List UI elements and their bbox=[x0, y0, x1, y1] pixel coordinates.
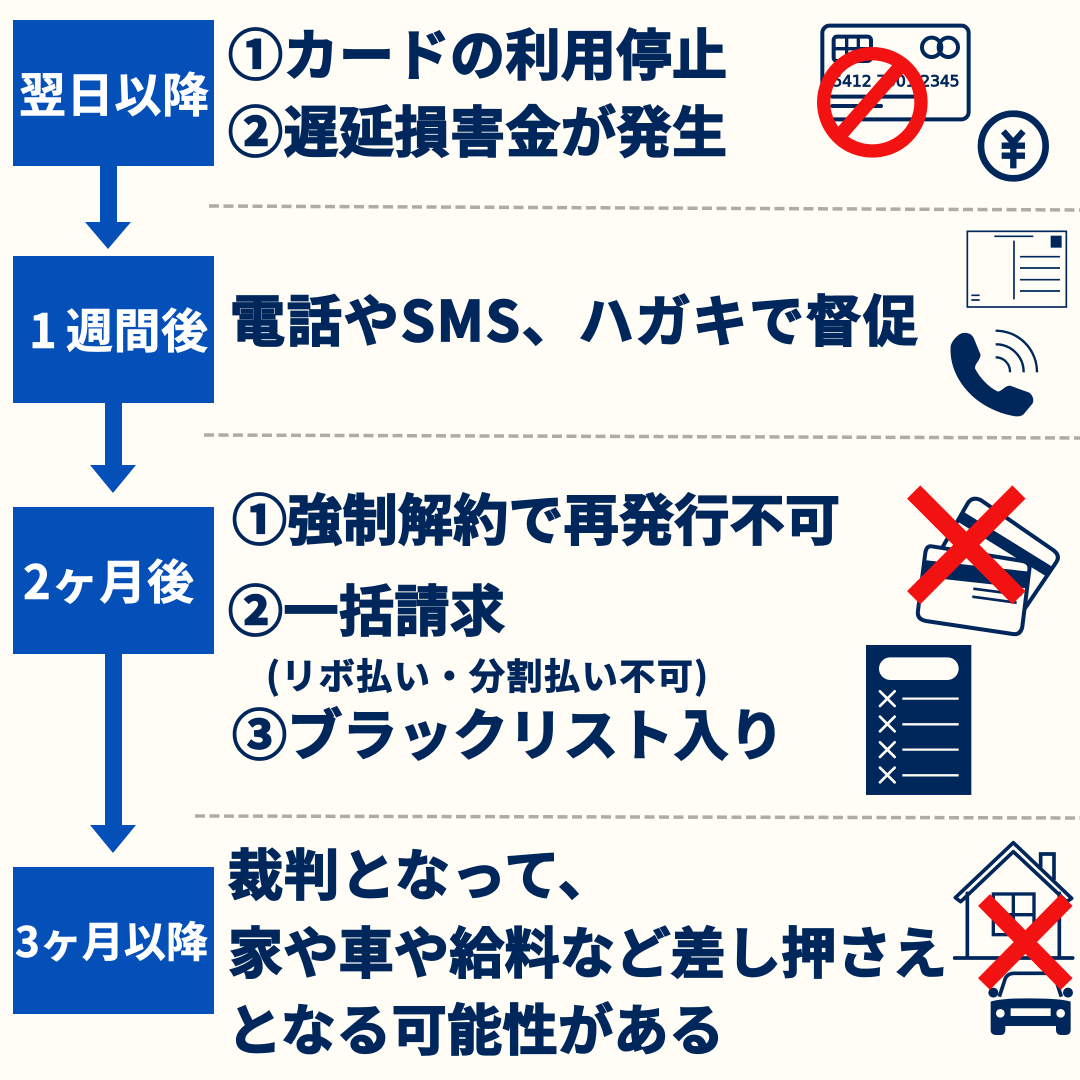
text: late fee: ②遅延損害金が発生 bbox=[228, 88, 727, 168]
text: lump-sum demand: ②一括請求 bbox=[228, 567, 505, 647]
icon: crossed-out credit cards bbox=[914, 492, 1058, 634]
icon: blacklist document bbox=[866, 645, 971, 795]
arrow: next-day to one week bbox=[85, 166, 131, 249]
panel: step 4 three months onward bbox=[13, 831, 1073, 1066]
panel: step 2 one week later bbox=[13, 231, 1066, 416]
icon: credit card prohibited: 5412 7901 2345 bbox=[832, 72, 960, 91]
icon: yen coin bbox=[981, 114, 1046, 178]
arrow: one week to two months bbox=[90, 403, 136, 493]
text: card suspended: ①カードの利用停止 bbox=[228, 11, 727, 91]
icon: house and car crossed out bbox=[955, 843, 1073, 1035]
text: blacklisted: ③ブラックリスト入り bbox=[232, 691, 784, 771]
step label: 1週間後 bbox=[13, 256, 214, 403]
step label: 1週間後: 1 bbox=[29, 293, 57, 362]
step label: 翌日以降: 翌日以降 bbox=[19, 57, 209, 126]
text: forced cancellation: ①強制解約で再発行不可 bbox=[232, 476, 840, 556]
step label: 3ヶ月以降 bbox=[13, 867, 214, 1014]
text: dunning by phone, SMS, postcard: 電話やSMS、ハガキで督促 bbox=[230, 277, 918, 357]
step label: 1週間後: 週間後 bbox=[66, 293, 208, 362]
step label: 翌日以降 bbox=[13, 20, 214, 166]
panel: step 3 two months later bbox=[13, 476, 1058, 795]
text: seizure of house, car, salary: 家や車や給料など差し押さえ bbox=[228, 909, 947, 989]
arrow: two months to three months bbox=[90, 654, 136, 853]
text: no revolving or installments: (リボ払い・分割払い不可) bbox=[266, 648, 708, 700]
step label: 2ヶ月後: 2ヶ月後 bbox=[23, 544, 194, 613]
panel: step 1 next day onward bbox=[13, 11, 1046, 178]
icon: telephone bbox=[951, 331, 1037, 416]
icon: postcard bbox=[967, 231, 1066, 307]
icon: credit card prohibited bbox=[822, 26, 969, 151]
step label: 3ヶ月以降: 3ヶ月以降 bbox=[15, 909, 208, 970]
text: lawsuit: 裁判となって、 bbox=[228, 831, 613, 911]
text: possibility: となる可能性がある bbox=[227, 986, 724, 1066]
step label: 2ヶ月後 bbox=[13, 507, 214, 654]
